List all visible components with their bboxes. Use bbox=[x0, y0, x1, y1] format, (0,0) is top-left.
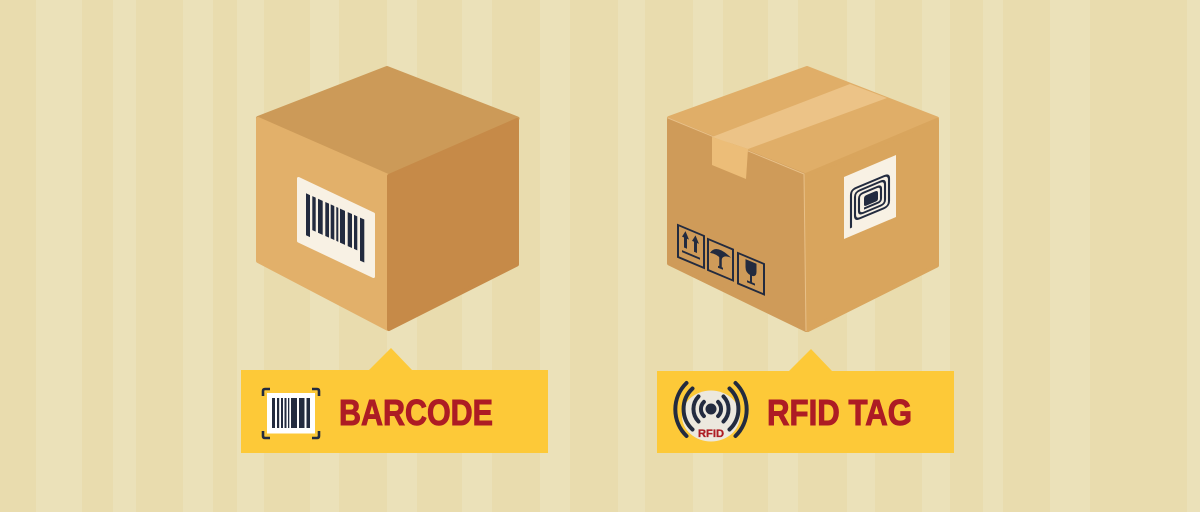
RFID sticker bbox=[844, 155, 896, 239]
edge highlights bbox=[668, 118, 806, 331]
label: RFID TAG: RFID TAG bbox=[767, 392, 912, 433]
box right face bbox=[806, 120, 937, 330]
cardboard box with RFID tag bbox=[668, 68, 937, 331]
packing tape on top bbox=[712, 84, 887, 149]
box left face bbox=[669, 120, 806, 330]
banner: barcode bbox=[241, 348, 548, 453]
handling symbols bbox=[678, 225, 764, 294]
barcode label bbox=[298, 178, 374, 276]
icon: fragile glass bbox=[738, 253, 764, 294]
banner shape with pointer bbox=[657, 349, 954, 453]
icon: keep dry umbrella bbox=[708, 239, 733, 280]
label: BARCODE: BARCODE bbox=[339, 392, 493, 433]
banner: RFID tag bbox=[657, 349, 954, 453]
icon: barcode scanner frame bbox=[263, 389, 319, 438]
icon: this way up bbox=[678, 225, 704, 268]
banner shape with pointer bbox=[241, 348, 548, 453]
icon: RFID signal bbox=[675, 383, 747, 442]
box left face bbox=[258, 119, 388, 329]
box top face bbox=[669, 68, 937, 173]
cardboard box with barcode bbox=[258, 68, 518, 329]
box right face bbox=[389, 120, 517, 329]
packing tape flap bbox=[712, 137, 748, 179]
box top face bbox=[258, 68, 518, 174]
icon: RFID signal: RFID bbox=[698, 428, 724, 440]
